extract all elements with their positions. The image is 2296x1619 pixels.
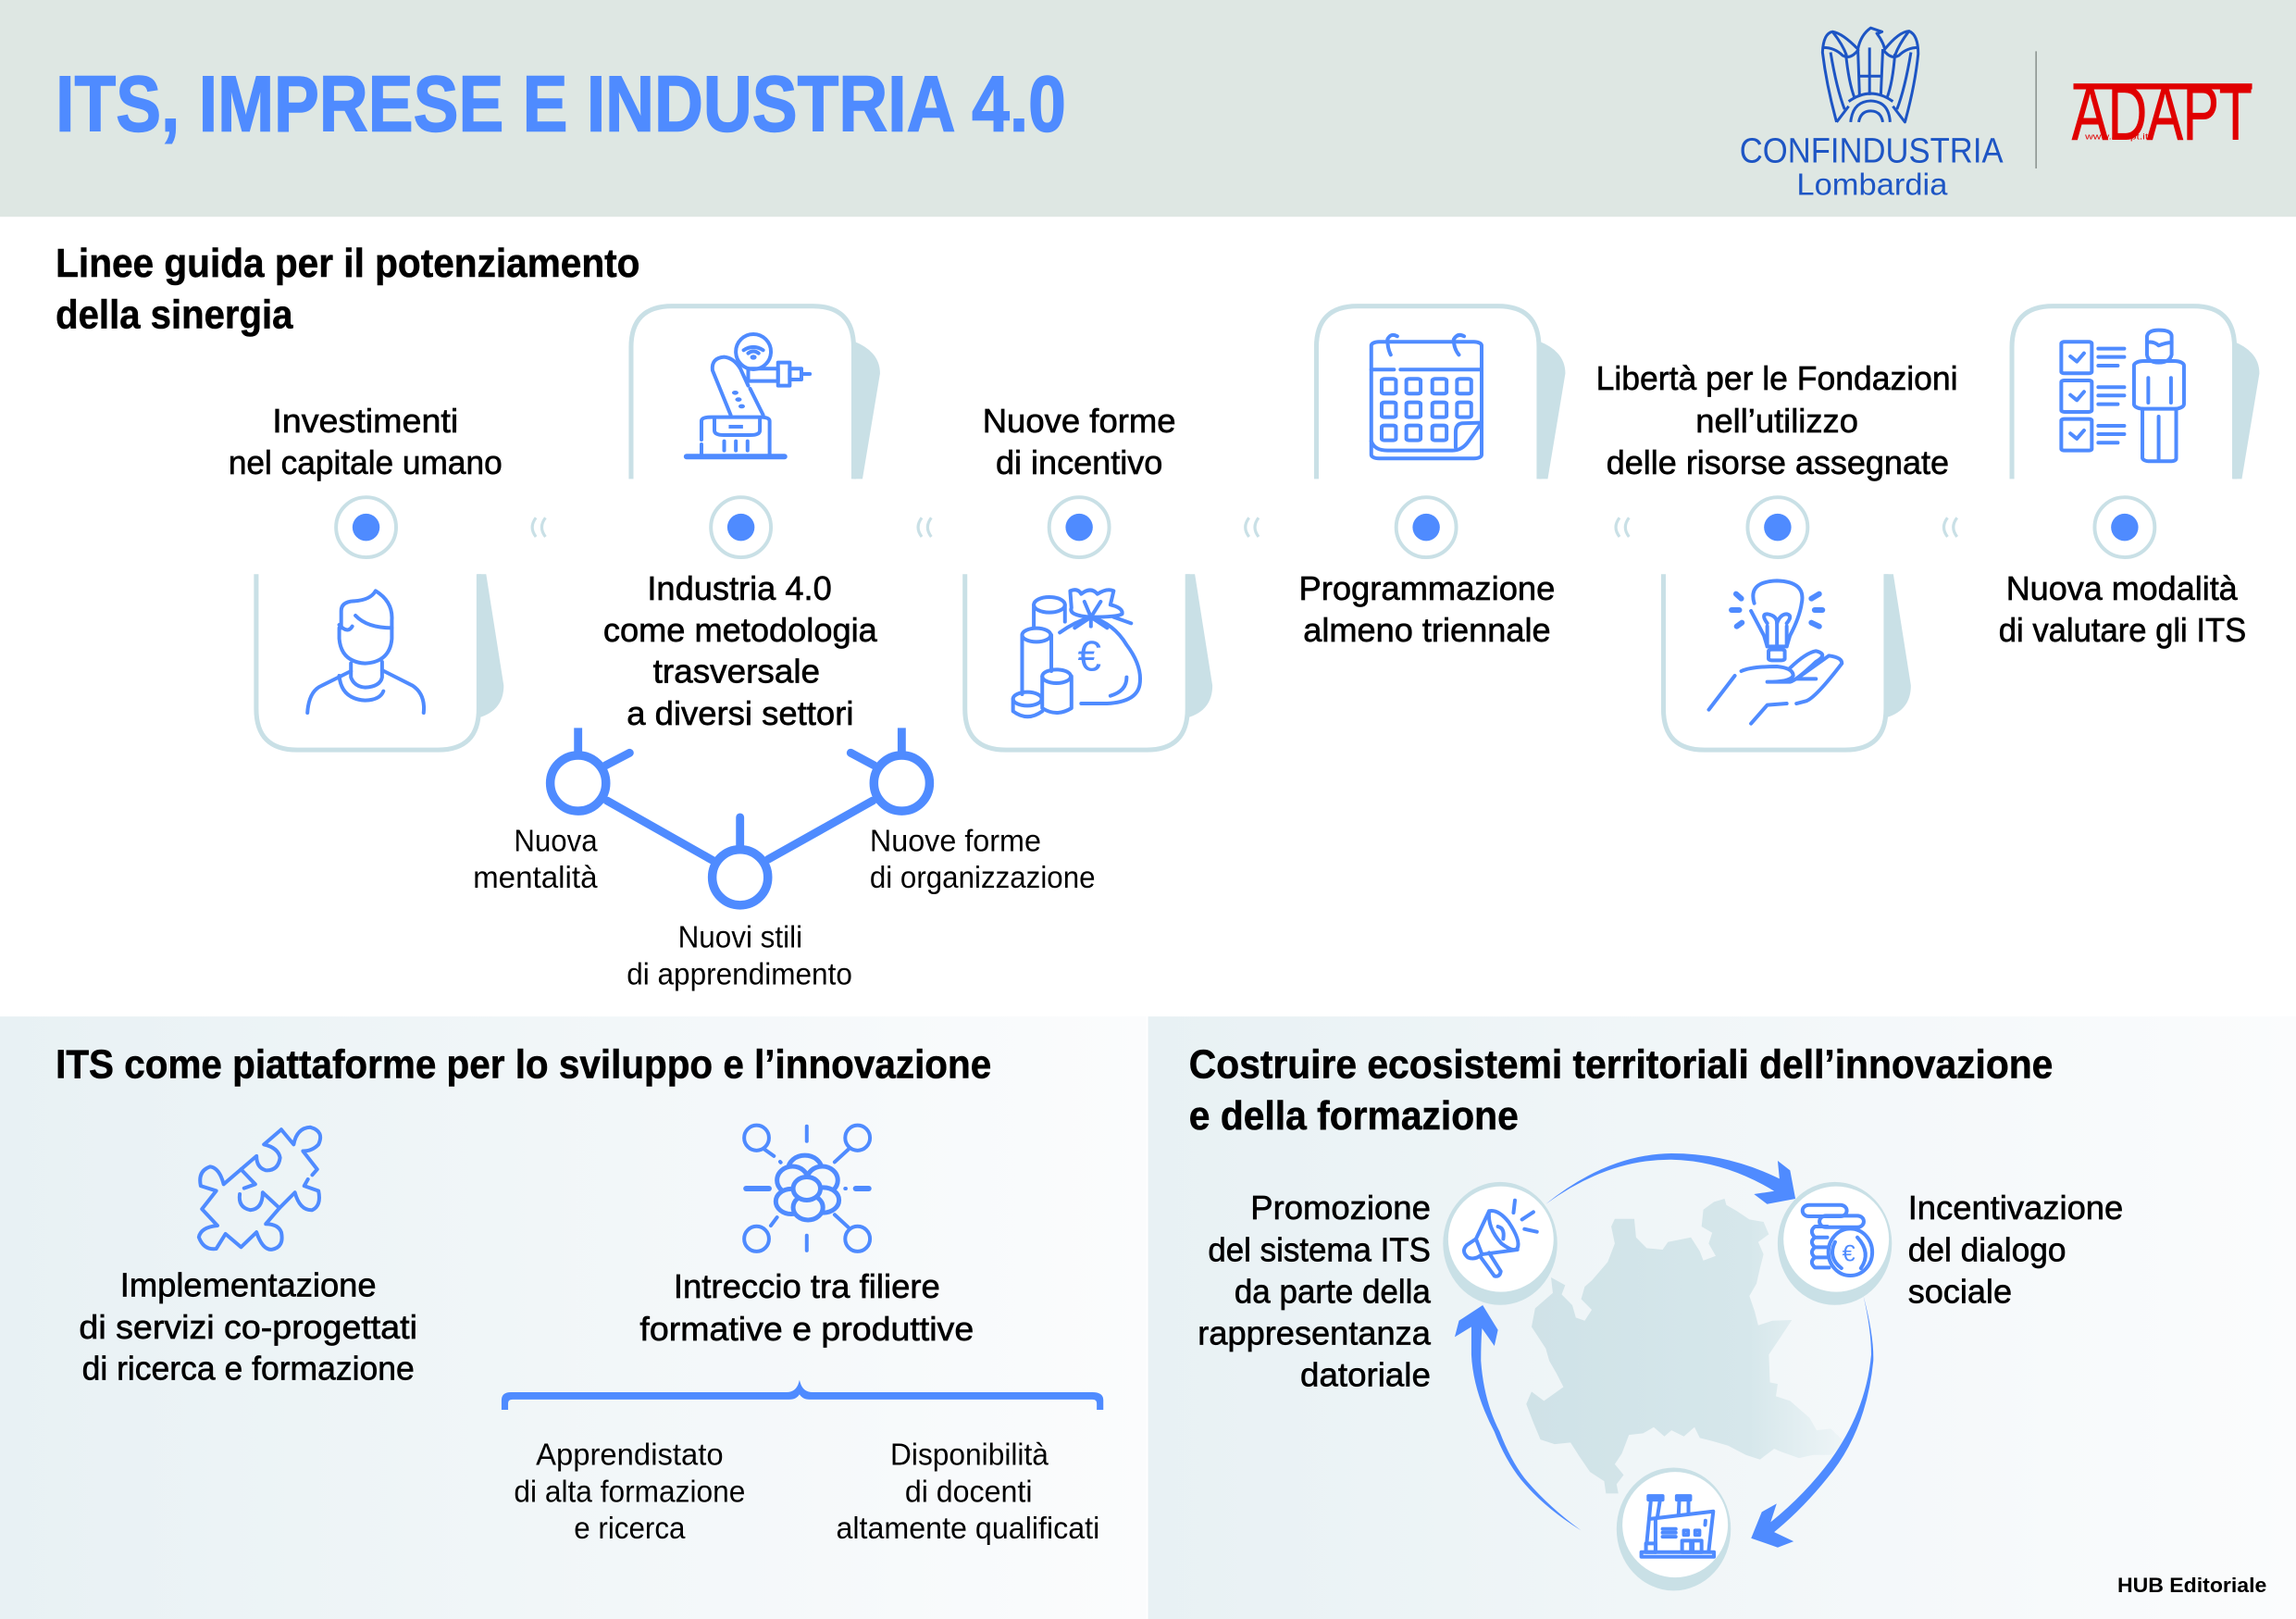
text: nuova modalità: Nuova modalità bbox=[2006, 569, 2238, 607]
text: libertà per le fondazioni: nell’utilizzo bbox=[1695, 402, 1858, 440]
text: apprendistato: di alta formazione bbox=[514, 1476, 745, 1510]
text: promozione del sistema ITS: del sistema ITS bbox=[1208, 1230, 1431, 1268]
icon: coins bbox=[1778, 1182, 1892, 1305]
text: nuova mentalità: Nuova bbox=[514, 824, 598, 858]
icon: robot arm bbox=[687, 334, 810, 456]
text: investimenti: nel capitale umano bbox=[229, 443, 503, 481]
panel: ITS come piattaforme bbox=[0, 1016, 1147, 1619]
text: intreccio tra filiere bbox=[639, 1267, 974, 1348]
text: intreccio tra filiere: Intreccio tra filiere bbox=[674, 1267, 940, 1305]
text: incentivazione del dialogo sociale: Incentivazione bbox=[1908, 1189, 2123, 1227]
panel: ecosistemi territoriali bbox=[1148, 1016, 2296, 1619]
heading: costruire ecosistemi: e della formazione bbox=[1189, 1094, 1519, 1139]
text: implementazione: Implementazione bbox=[120, 1265, 377, 1303]
timeline dots bbox=[336, 497, 2154, 557]
card: robot bbox=[631, 306, 880, 479]
icon: money bag bbox=[1013, 590, 1140, 716]
logo divider bbox=[2035, 51, 2037, 168]
heading: linee guida bbox=[56, 242, 639, 337]
text: promozione del sistema ITS: datoriale bbox=[1300, 1356, 1431, 1394]
card: lampadina bbox=[1663, 574, 1911, 750]
card: calendario bbox=[1316, 306, 1565, 479]
text: nuova modalità bbox=[1999, 569, 2246, 649]
text: industria 4.0: come metodologia bbox=[603, 611, 878, 649]
icon: coins: € bbox=[1843, 1240, 1855, 1266]
credit: HUB Editoriale bbox=[2117, 1574, 2266, 1597]
text: programmazione: almeno triennale bbox=[1303, 611, 1551, 649]
text: apprendistato: e ricerca bbox=[574, 1512, 686, 1546]
heading: ITS come piattaforme: ITS come piattaforme per lo sviluppo e l’innovazione bbox=[56, 1043, 991, 1088]
icon: calendar bbox=[1371, 335, 1482, 458]
text: nuove forme di organizzazione bbox=[870, 824, 1096, 895]
text: nuove forme di incentivo: Nuove forme bbox=[983, 402, 1176, 440]
text: incentivazione del dialogo sociale: sociale bbox=[1908, 1272, 2012, 1310]
text: disponibilità: di docenti bbox=[905, 1476, 1033, 1510]
icon: lightbulb in hand bbox=[1709, 580, 1842, 724]
text: investimenti bbox=[229, 402, 503, 481]
icon: molecule network bbox=[744, 1126, 870, 1252]
icon: factory bbox=[1617, 1467, 1731, 1590]
logo: Confindustria Lombardia: Lombardia bbox=[1796, 168, 1948, 202]
heading: linee guida: della sinergia bbox=[56, 293, 293, 337]
text: promozione del sistema ITS bbox=[1198, 1189, 1432, 1394]
arrow: incentivazione to imprese bbox=[1751, 1296, 1873, 1548]
text: libertà per le fondazioni: Libertà per le Fondazioni bbox=[1596, 359, 1957, 397]
card: checklist bbox=[2012, 306, 2259, 479]
text: industria 4.0: trasversale bbox=[653, 652, 820, 690]
text: implementazione: di ricerca e formazione bbox=[82, 1350, 415, 1388]
icon: puzzle bbox=[199, 1127, 320, 1250]
arrow: promozione to incentivazione bbox=[1545, 1153, 1795, 1204]
text: disponibilità: Disponibilità bbox=[890, 1438, 1049, 1472]
logo: Confindustria Lombardia: CONFINDUSTRIA bbox=[1740, 132, 2004, 171]
text: promozione del sistema ITS: rappresentanza bbox=[1198, 1314, 1432, 1352]
brace bbox=[503, 1383, 1102, 1409]
text: nuova modalità: di valutare gli ITS bbox=[1999, 611, 2246, 649]
heading: costruire ecosistemi bbox=[1189, 1043, 2053, 1139]
text: libertà per le fondazioni bbox=[1596, 359, 1957, 481]
text: apprendistato bbox=[514, 1438, 745, 1546]
text: nuove forme di incentivo: di incentivo bbox=[996, 443, 1162, 481]
text: nuova mentalità bbox=[473, 824, 598, 895]
text: nuovi stili di apprendimento bbox=[627, 921, 852, 991]
text: disponibilità bbox=[836, 1438, 1099, 1546]
text: intreccio tra filiere: formative e produttive bbox=[639, 1310, 974, 1348]
header band bbox=[0, 0, 2296, 217]
arrow: imprese to promozione bbox=[1455, 1305, 1582, 1530]
text: industria 4.0: Industria 4.0 bbox=[647, 569, 832, 607]
text: libertà per le fondazioni: delle risorse assegnate bbox=[1607, 443, 1949, 481]
icon: person bbox=[307, 591, 424, 713]
text: incentivazione del dialogo sociale bbox=[1908, 1189, 2123, 1310]
text: nuovi stili di apprendimento: Nuovi stili bbox=[678, 921, 802, 955]
icon: megaphone bbox=[1443, 1182, 1558, 1305]
text: nuove forme di organizzazione: di organizzazione bbox=[870, 861, 1096, 895]
text: programmazione bbox=[1298, 569, 1555, 649]
heading: costruire ecosistemi: Costruire ecosistemi territoriali dell’innovazione bbox=[1189, 1043, 2053, 1088]
text: promozione del sistema ITS: Promozione bbox=[1250, 1189, 1431, 1227]
heading: linee guida: Linee guida per il potenziamento bbox=[56, 242, 639, 286]
logo: ADAPT: www.adapt.it bbox=[2084, 131, 2149, 142]
text: implementazione bbox=[79, 1265, 417, 1388]
chevron arrows bbox=[532, 517, 1957, 537]
text: apprendistato: Apprendistato bbox=[536, 1438, 724, 1472]
network diagram bbox=[551, 728, 929, 905]
text: implementazione: di servizi co-progettati bbox=[79, 1308, 417, 1346]
text: nuovi stili di apprendimento: di apprendimento bbox=[627, 957, 852, 991]
text: disponibilità: altamente qualificati bbox=[836, 1512, 1099, 1546]
text: investimenti: Investimenti bbox=[272, 402, 458, 440]
title: ITS, IMPRESE E INDUSTRIA 4.0 bbox=[56, 61, 1066, 149]
logo: Confindustria Lombardia bbox=[1740, 28, 2004, 202]
text: nuove forme di organizzazione: Nuove forme bbox=[870, 824, 1041, 858]
icon: money bag: € bbox=[1077, 632, 1101, 680]
text: nuova mentalità: mentalità bbox=[473, 861, 598, 895]
text: incentivazione del dialogo sociale: del dialogo bbox=[1908, 1230, 2066, 1268]
text: industria 4.0: a diversi settori bbox=[627, 694, 853, 732]
text: promozione del sistema ITS: da parte della bbox=[1235, 1272, 1432, 1310]
text: nuove forme di incentivo bbox=[983, 402, 1176, 481]
card: sacco di monete bbox=[965, 574, 1212, 750]
map: Lombardia bbox=[1526, 1199, 1845, 1493]
card: persona bbox=[256, 574, 503, 750]
text: industria 4.0 bbox=[603, 569, 878, 732]
icon: checklist and person bbox=[2061, 330, 2184, 461]
text: programmazione: Programmazione bbox=[1298, 569, 1555, 607]
